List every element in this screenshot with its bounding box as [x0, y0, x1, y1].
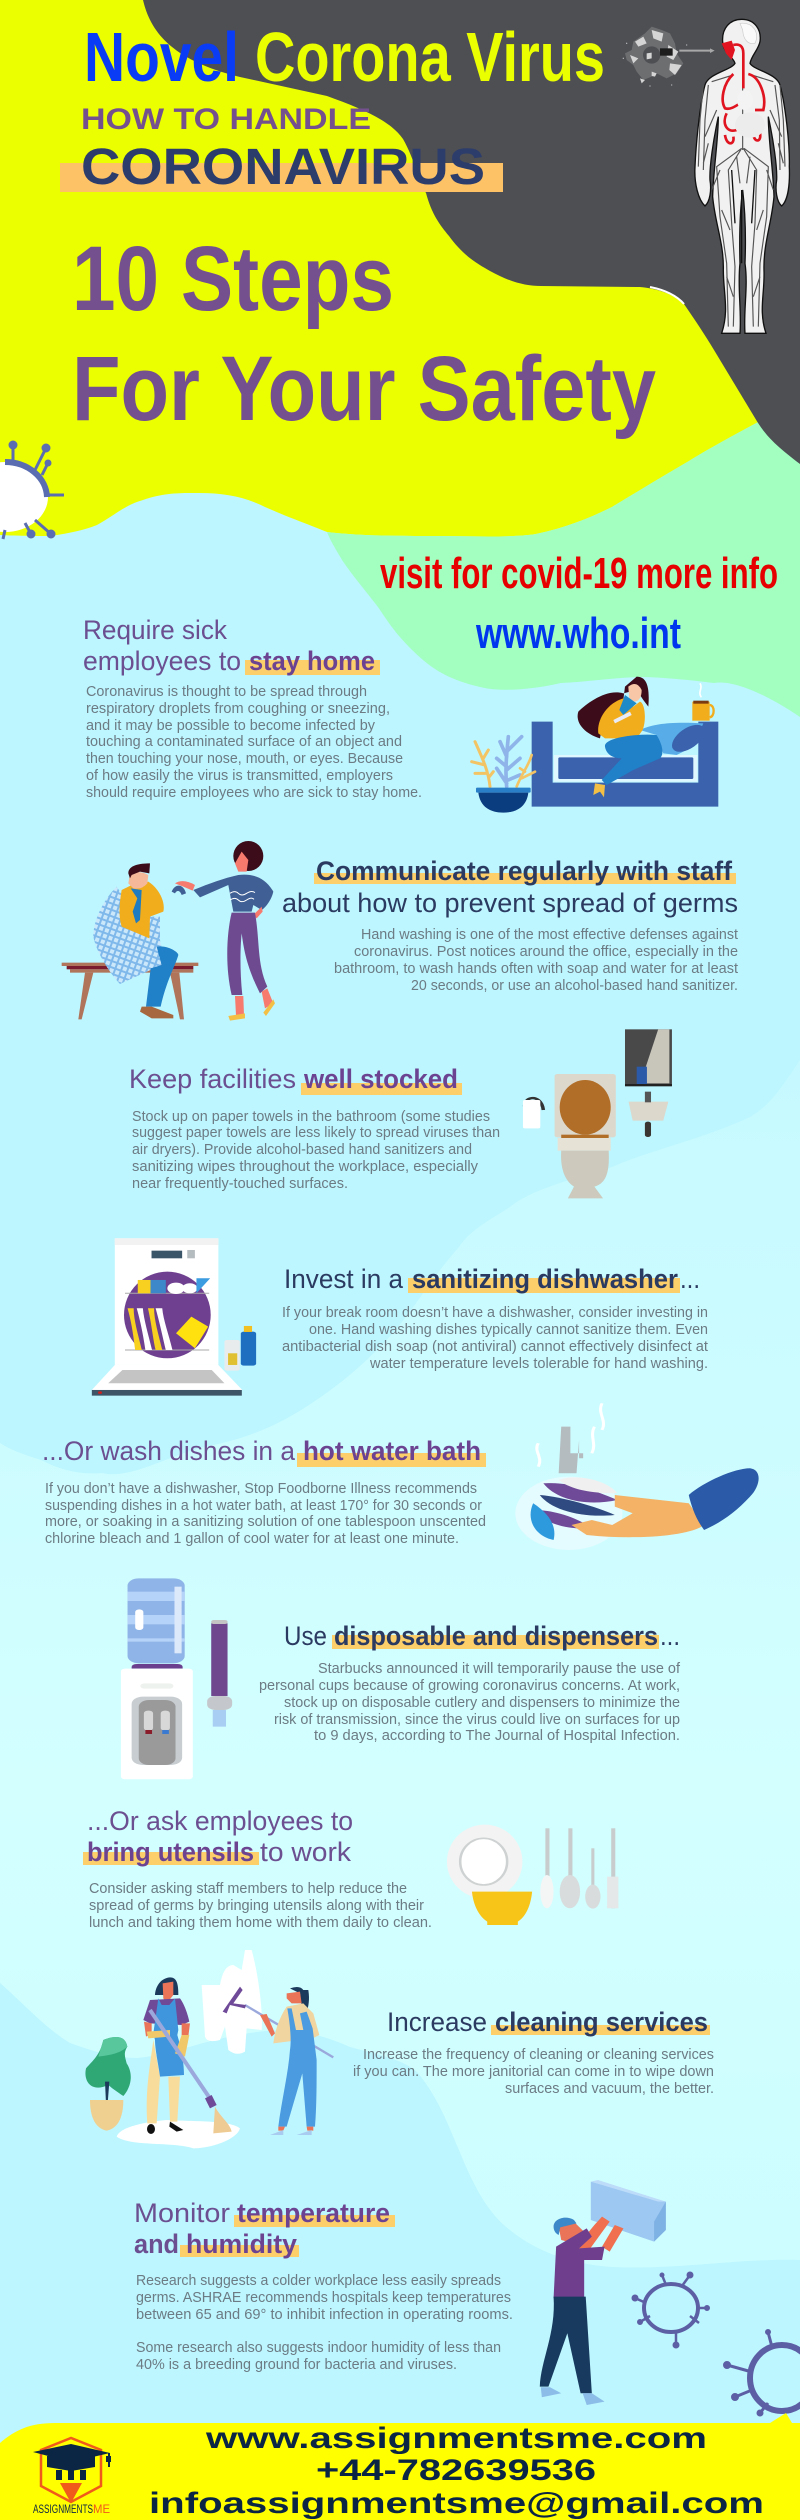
heading	[83, 1806, 353, 1867]
heading: cleaning services	[495, 2007, 708, 2037]
text block: respiratory droplets from coughing or sneezing,	[86, 701, 390, 717]
text block: bathroom, to wash hands often with soap and water for at least	[334, 961, 738, 977]
text block: surfaces and vacuum, the better.	[505, 2081, 714, 2097]
callout: visit for covid-19 more info	[380, 549, 778, 658]
contact details: www.assignmentsme.com	[205, 2422, 707, 2455]
heading: Require sick	[83, 615, 227, 645]
contact details: +44-782639536	[316, 2454, 596, 2487]
heading: Monitor	[134, 2198, 230, 2228]
text block: one. Hand washing dishes typically cannot sanitize them. Even	[309, 1322, 708, 1338]
text block: If you don’t have a dishwasher, Stop Foodborne Illness recommends	[45, 1481, 477, 1497]
panel: communicate regularly with staff	[62, 841, 738, 1021]
title: 10 Steps For Your Safety: For Your Safety	[72, 338, 656, 440]
text block: suggest paper towels are less likely to spread viruses than	[132, 1125, 500, 1141]
heading: sanitizing dishwasher	[412, 1264, 678, 1294]
heading: disposable and dispensers	[334, 1621, 658, 1651]
text block: of how easily the virus is transmitted, employers	[86, 768, 393, 784]
heading	[387, 2007, 710, 2037]
illustration: dishwasher	[92, 1238, 256, 1396]
text block	[132, 1109, 500, 1192]
heading: Invest in a	[284, 1264, 404, 1294]
heading: ...Or ask employees to	[87, 1806, 353, 1836]
text block: antibacterial dish soap (not antiviral) cannot effectively disinfect at	[282, 1339, 708, 1355]
text block	[89, 1881, 432, 1931]
text block: between 65 and 69° to inhibit infection in operating rooms.	[136, 2307, 513, 2323]
text block: sanitizing wipes throughout the workplace, especially	[132, 1159, 479, 1175]
text block: personal cups because of growing coronavirus concerns. At work,	[259, 1678, 680, 1694]
text block: 20 seconds, or use an alcohol-based hand sanitizer.	[411, 978, 738, 994]
heading: to work	[260, 1837, 352, 1867]
text block: to 9 days, according to The Journal of Hospital Infection.	[314, 1728, 680, 1744]
text block: more, or soaking in a sanitizing solution of one tablespoon unscented	[45, 1514, 486, 1530]
heading	[134, 2198, 395, 2259]
text block: chlorine bleach and 1 gallon of cool water for at least one minute.	[45, 1531, 459, 1547]
text block: risk of transmission, since the virus could live on surfaces for up	[274, 1712, 680, 1728]
panel: wash dishes in a hot water bath	[42, 1403, 759, 1550]
panel: monitor temperature and humidity	[134, 2180, 666, 2405]
heading: temperature	[237, 2198, 390, 2228]
text block: if you can. The more janitorial can come in to wipe down	[353, 2064, 714, 2080]
title: Novel Corona Virus: Corona Virus	[255, 18, 605, 96]
text block: Research suggests a colder workplace less easily spreads	[136, 2273, 501, 2289]
heading: and	[134, 2229, 179, 2259]
text block	[45, 1481, 486, 1547]
text block: should require employees who are sick to stay home.	[86, 785, 422, 801]
heading: bring utensils	[87, 1837, 254, 1867]
panel: use disposable and dispensers	[121, 1578, 681, 1779]
panel: require sick employees to stay home	[83, 615, 718, 813]
text block	[282, 1305, 708, 1372]
text block: Consider asking staff members to help reduce the	[89, 1881, 407, 1897]
illustration: human body anatomy	[695, 19, 789, 333]
contact details: infoassignmentsme@gmail.com	[149, 2487, 764, 2520]
illustration: sick woman on sofa	[472, 677, 718, 813]
text block: Hand washing is one of the most effective defenses against	[361, 927, 738, 943]
illustration: washing dishes	[515, 1403, 759, 1550]
logo: AssignmentsMe: ASSIGNMENTS	[33, 2502, 93, 2516]
heading: ...	[660, 1621, 680, 1651]
heading: stay home	[249, 646, 375, 676]
text block: near frequently-touched surfaces.	[132, 1176, 348, 1192]
callout: visit for covid-19 more info: www.who.int	[475, 609, 681, 658]
heading: hot water bath	[303, 1436, 481, 1466]
panel: increase cleaning services	[85, 1950, 714, 2148]
panel: ask employees to bring utensils	[83, 1806, 618, 1931]
heading	[83, 615, 380, 676]
icon: virus particle and arrow to body	[623, 27, 715, 87]
illustration: technician and air conditioner	[540, 2180, 666, 2405]
heading	[129, 1064, 462, 1095]
icon: virus top left	[0, 442, 64, 539]
title: Novel Corona Virus: Novel	[84, 18, 239, 96]
text block: Starbucks announced it will temporarily pause the use of	[318, 1661, 681, 1677]
heading: about how to prevent spread of germs	[282, 888, 738, 918]
heading: Communicate regularly with staff	[316, 856, 733, 886]
heading: Use	[284, 1621, 327, 1651]
heading	[282, 856, 738, 918]
contact details	[149, 2422, 764, 2520]
text block: suspending dishes in a hot water bath, at least 170° for 30 seconds or	[45, 1498, 482, 1514]
illustration: water cooler and cup dispenser	[121, 1578, 232, 1779]
text block: Some research also suggests indoor humidity of less than	[136, 2340, 501, 2356]
illustration: sick man and colleague	[62, 841, 275, 1021]
text block: If your break room doesn’t have a dishwasher, consider investing in	[282, 1305, 708, 1321]
text block: touching a contaminated surface of an object and	[86, 734, 402, 750]
heading: Keep facilities	[129, 1064, 296, 1094]
heading: well stocked	[303, 1064, 458, 1094]
heading: employees to	[83, 646, 241, 676]
illustration: cleaners with mop and squeegee	[85, 1950, 333, 2148]
title: Novel Corona Virus	[84, 18, 605, 96]
text block: and it may be possible to become infected by	[86, 718, 376, 734]
text block: coronavirus. Post notices around the office, especially in the	[354, 944, 738, 960]
text block: Coronavirus is thought to be spread through	[86, 684, 367, 700]
text block: spread of germs by bringing utensils along with their	[89, 1898, 424, 1914]
illustration: plate, bowl and cutlery	[447, 1825, 618, 1925]
text block	[353, 2047, 714, 2097]
text block: lunch and taking them home with them daily to clean.	[89, 1915, 432, 1931]
text block	[334, 927, 738, 994]
heading	[284, 1264, 700, 1294]
text block: air dryers). Provide alcohol-based hand sanitizers and	[132, 1142, 472, 1158]
text block: 40% is a breeding ground for bacteria and viruses.	[136, 2357, 457, 2373]
illustration: toilet, sink and paper roll	[523, 1029, 672, 1198]
heading: How to handle coronavirus: CORONAVIRUS	[81, 138, 485, 195]
heading: How to handle coronavirus	[60, 103, 503, 195]
heading: ...Or wash dishes in a	[42, 1436, 296, 1466]
text block: stock up on disposable cutlery and dispensers to minimize the	[284, 1695, 680, 1711]
heading: Increase	[387, 2007, 487, 2037]
icon: virus bottom right	[724, 2330, 800, 2416]
text block	[86, 684, 422, 801]
text block: germs. ASHRAE recommends hospitals keep temperatures	[136, 2290, 511, 2306]
panel: footer contact band	[0, 2413, 800, 2520]
title: 10 Steps For Your Safety: 10 Steps	[72, 228, 394, 330]
logo: AssignmentsMe: ME	[93, 2502, 110, 2516]
panel: invest in a sanitizing dishwasher	[92, 1238, 708, 1396]
panel: keep facilities well stocked	[129, 1029, 672, 1198]
text block	[136, 2273, 513, 2373]
logo: AssignmentsMe	[33, 2438, 111, 2516]
icon: virus lower right	[632, 2272, 710, 2348]
text block	[259, 1661, 681, 1744]
heading: humidity	[186, 2229, 297, 2259]
title: 10 Steps For Your Safety	[72, 228, 656, 440]
heading	[42, 1436, 486, 1467]
text block: water temperature levels tolerable for hand washing.	[369, 1356, 708, 1372]
text block: Stock up on paper towels in the bathroom (some studies	[132, 1109, 490, 1125]
text block: Increase the frequency of cleaning or cleaning services	[363, 2047, 714, 2063]
heading: How to handle coronavirus: HOW TO HANDLE	[81, 103, 371, 136]
heading: ...	[680, 1264, 700, 1294]
text block: then touching your nose, mouth, or eyes. Because	[86, 751, 403, 767]
